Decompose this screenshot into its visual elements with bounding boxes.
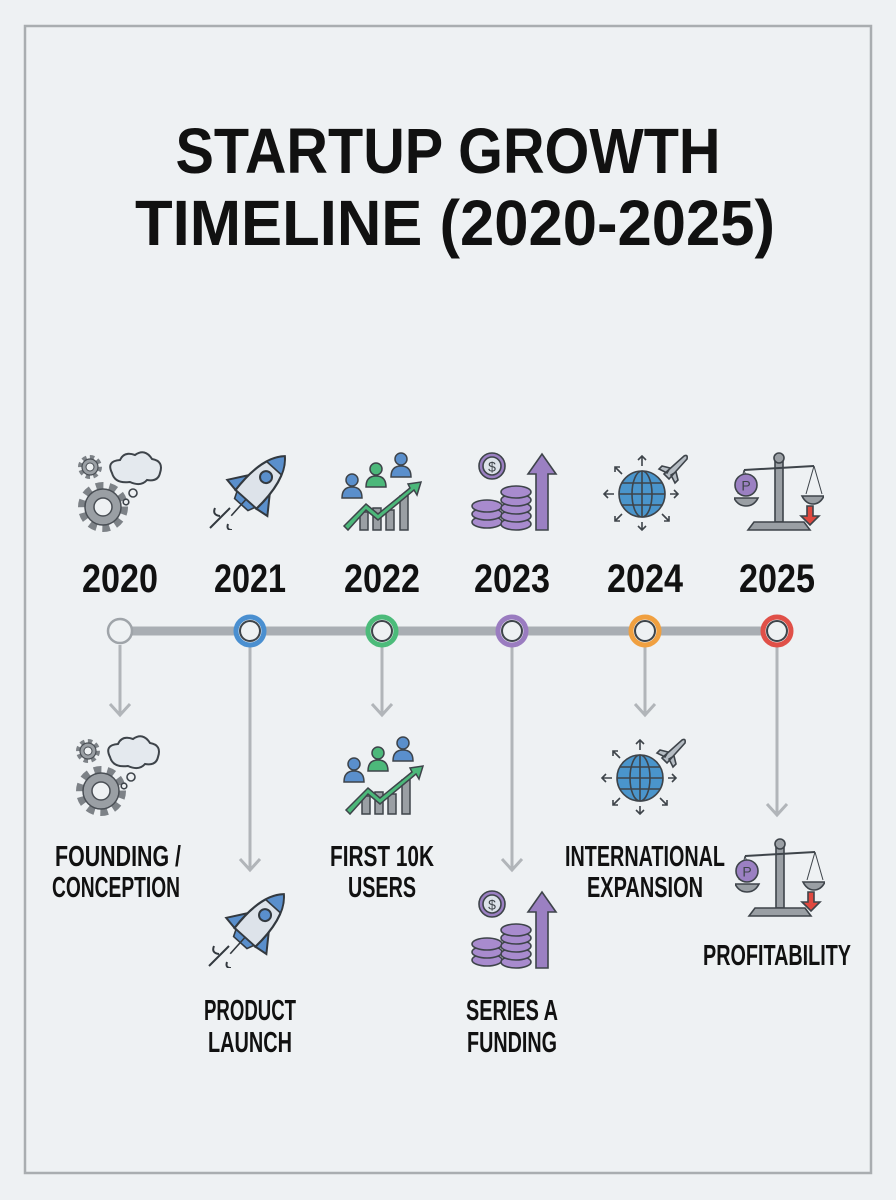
year labels [82,557,815,601]
milestone: series a funding: SERIES A [466,995,558,1027]
milestone: product launch: PRODUCT [204,995,296,1027]
title: STARTUP GROWTH [176,115,720,187]
milestone: first 10k users: FIRST 10K [330,841,434,873]
top icons row [81,438,824,534]
title [135,115,775,259]
milestone: series a funding: FUNDING [467,1027,557,1059]
milestone: product launch [204,876,304,1059]
icon: gears and cloud [81,452,161,527]
milestone: international expansion: INTERNATIONAL [565,841,725,873]
year labels: 2022 [344,557,420,601]
milestone: founding: CONCEPTION [52,872,180,904]
year labels: 2024 [607,557,684,601]
year labels: 2025 [739,557,815,601]
connector arrows [110,645,787,870]
year labels: 2020 [82,557,158,601]
milestone: international expansion [565,739,725,904]
icon: users growth [342,453,421,530]
milestone: founding [52,736,181,904]
milestone: founding: FOUNDING / [55,841,181,873]
year labels: 2021 [214,557,286,601]
milestone: product launch: LAUNCH [208,1027,292,1059]
milestone: series a funding [466,891,558,1059]
milestone: first 10k users [330,737,434,904]
milestone: first 10k users: USERS [348,872,416,904]
timeline nodes [108,617,791,645]
title: TIMELINE (2020-2025) [135,187,775,259]
icon: coins and arrow [472,453,556,530]
milestone: profitability [703,839,851,972]
year labels: 2023 [474,557,550,601]
icon: scale [734,453,824,530]
milestone: international expansion: EXPANSION [587,872,703,904]
icon: rocket [210,438,305,534]
timeline line [120,626,777,636]
icon: globe [604,455,687,530]
